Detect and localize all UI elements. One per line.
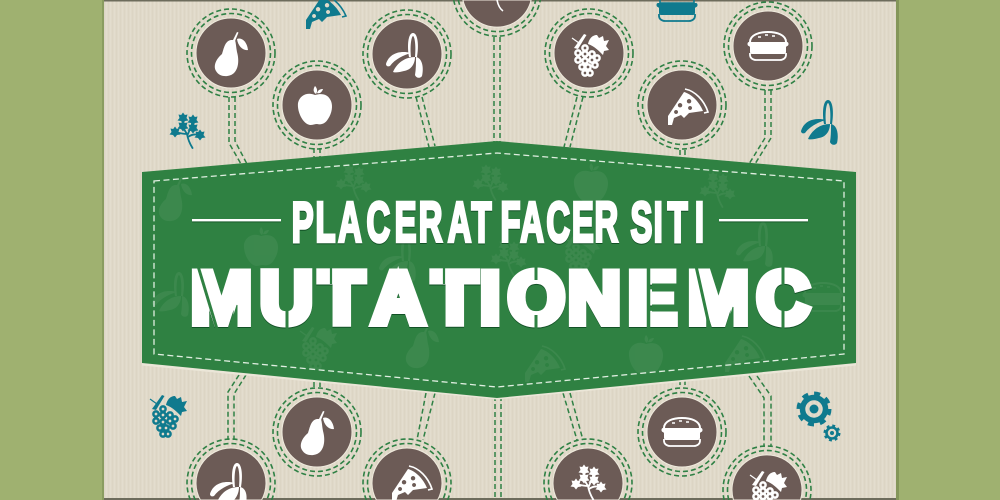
green banner — [142, 141, 856, 400]
heading: placerat facer siti: PLACERAT FACER SITI — [292, 190, 704, 254]
icon: small teal gear — [825, 426, 839, 440]
medallion: apple top — [273, 61, 361, 149]
medallion: grapes bottom — [723, 446, 811, 500]
medallion: pizza bottom — [363, 439, 451, 500]
medallion: pear top — [187, 9, 275, 97]
icon: teal burger — [656, 0, 698, 21]
medallion: pizza top — [638, 61, 726, 149]
right rule — [719, 219, 808, 221]
heading: mutationemc: MUTATIONEMC — [191, 258, 809, 339]
connectors — [228, 37, 771, 500]
medallion: parsley bottom — [544, 439, 632, 500]
medallion: grapes top — [545, 9, 633, 97]
icon: teal grapes — [150, 395, 187, 437]
left rule — [192, 219, 281, 221]
icon: teal pizza — [306, 0, 346, 29]
fabric panel — [102, 0, 899, 500]
medallion: banana top — [363, 10, 451, 98]
stencil slots — [198, 264, 783, 330]
ghost icons on banner — [152, 163, 844, 382]
medallion: burger bottom — [638, 388, 726, 476]
medallion: pear bottom — [273, 388, 361, 476]
medallion: burger top — [724, 2, 812, 90]
medallion: banana bottom — [187, 439, 275, 500]
medallion: top centre — [454, 0, 540, 36]
icon: large teal gear — [799, 394, 829, 424]
icon: teal banana — [801, 100, 838, 145]
icon: teal parsley — [170, 112, 206, 148]
